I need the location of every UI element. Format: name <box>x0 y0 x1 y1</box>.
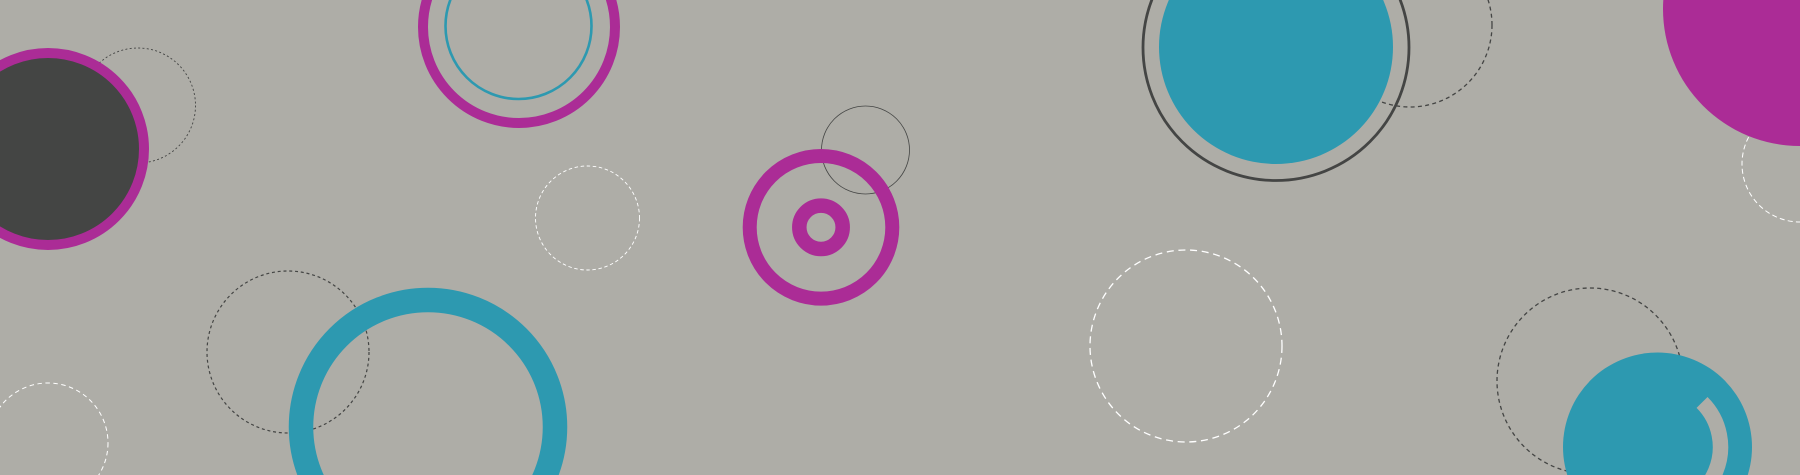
dark dashed circle, bottom right <box>1497 288 1683 474</box>
dotted grey circle, upper left <box>80 48 196 163</box>
concentric magenta target, centre <box>750 156 892 299</box>
large white dashed circle, centre right <box>1090 250 1282 442</box>
white dashed circle, bottom left <box>0 383 108 475</box>
solid magenta circle, top right corner <box>1663 0 1800 146</box>
white dashed circle, upper middle <box>536 166 640 270</box>
solid teal circle with grey arc, bottom right <box>1563 352 1752 475</box>
thin outlined circle, centre <box>822 106 910 194</box>
teal disc <box>1563 352 1752 475</box>
magenta ring with dark fill, upper left <box>0 53 144 245</box>
inner magenta ring <box>799 206 843 249</box>
grey arc cut-out <box>1658 402 1721 475</box>
dark outlined ring, top right <box>1143 0 1409 180</box>
thin teal ring, top <box>446 0 592 99</box>
thick teal ring, bottom <box>301 300 555 475</box>
magenta ring, top <box>423 0 615 123</box>
white dashed circle, right edge <box>1742 106 1800 222</box>
dark dashed circle, lower left <box>207 271 369 433</box>
dark dashed circle, top right <box>1328 0 1492 107</box>
outer magenta ring <box>750 156 892 299</box>
solid teal circle, top right <box>1159 0 1393 164</box>
